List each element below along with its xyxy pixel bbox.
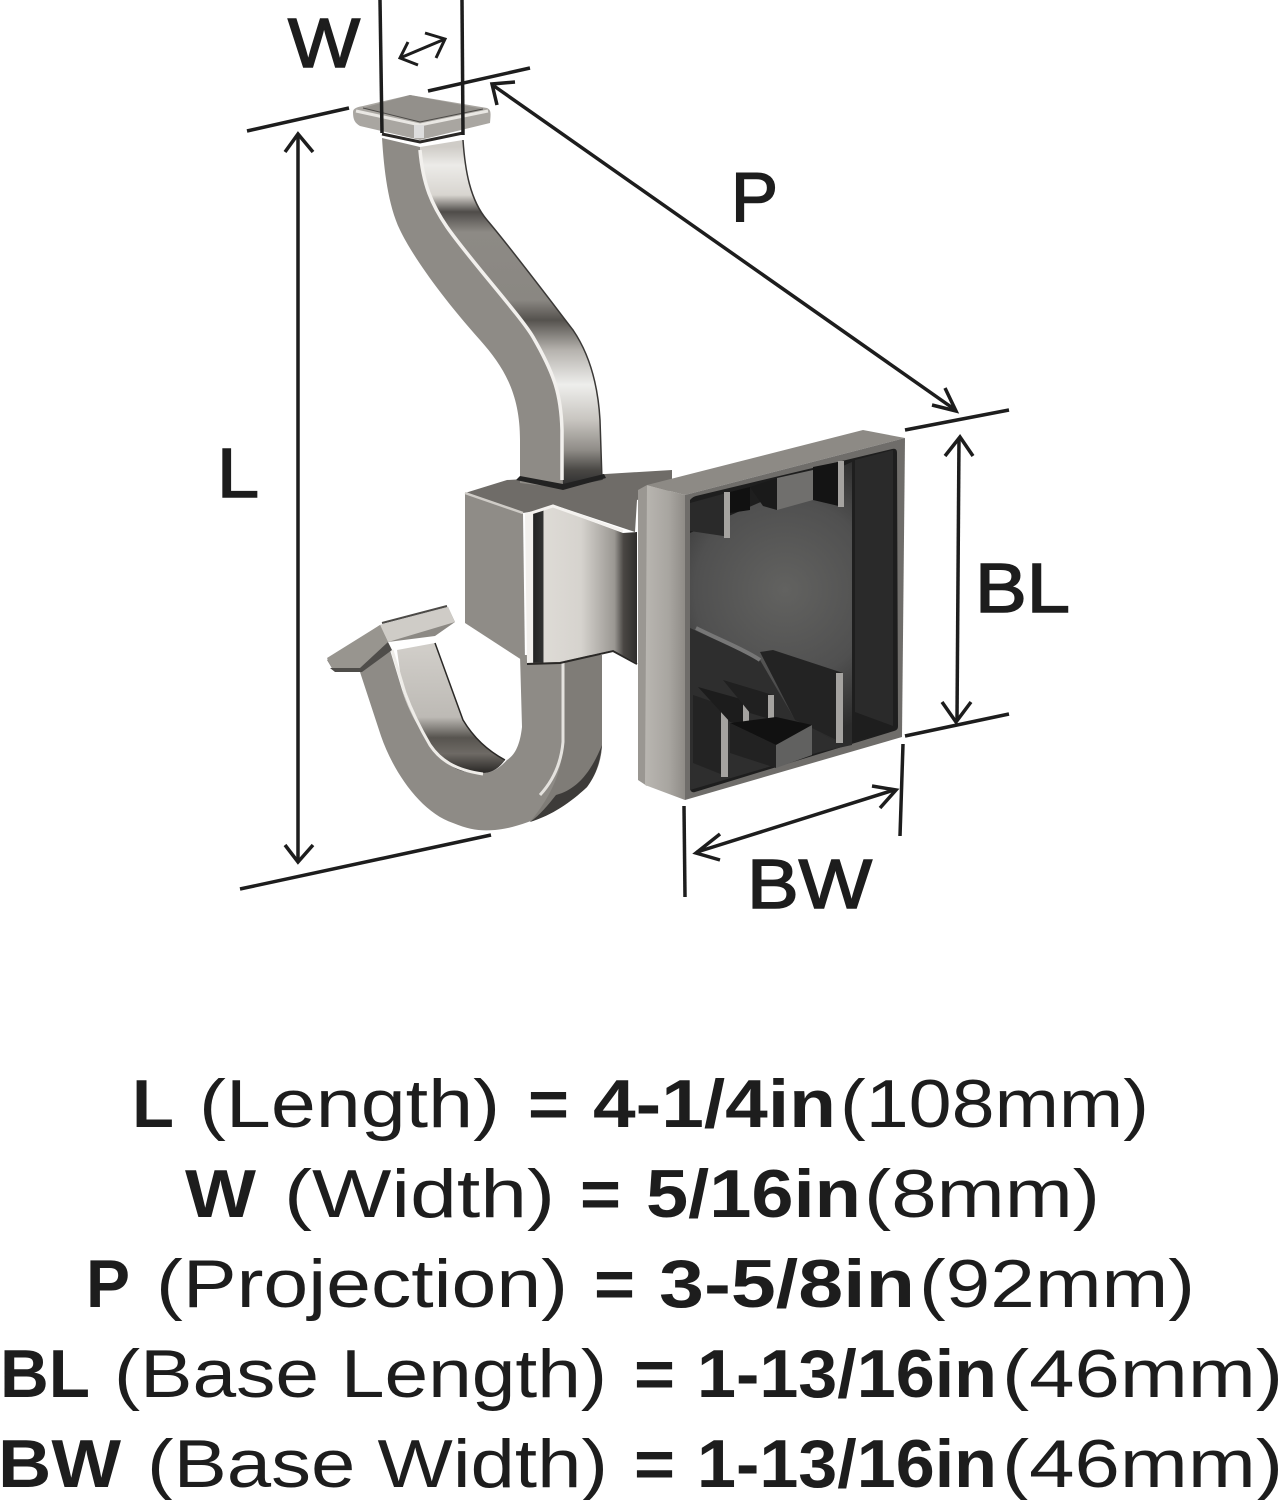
square base plate <box>638 430 905 800</box>
hook tip <box>327 606 455 672</box>
specification list <box>0 1066 1283 1500</box>
spec: width: (8mm) <box>864 1156 1100 1232</box>
dimension P <box>428 68 1009 430</box>
spec: projection: = <box>594 1246 635 1322</box>
top cap of hook <box>353 95 491 142</box>
spec: base length: = <box>634 1336 675 1412</box>
spec: projection: 3-5/8in <box>659 1246 915 1322</box>
dimension W <box>380 0 463 135</box>
spec: projection: (92mm) <box>919 1246 1195 1322</box>
upper arm of hook <box>382 138 606 490</box>
spec: base width: 1-13/16in <box>697 1426 997 1500</box>
spec: projection: (Projection) <box>156 1246 568 1322</box>
spec: base width <box>0 1426 1283 1500</box>
hook collar <box>465 470 672 664</box>
label BW: BW <box>747 845 872 923</box>
spec: width: W <box>185 1156 257 1232</box>
lower curved hook <box>360 643 602 830</box>
label W: W <box>288 4 360 82</box>
spec: base length: (46mm) <box>1002 1336 1283 1412</box>
inner clips <box>690 461 844 777</box>
spec: base length: BL <box>0 1336 90 1412</box>
label BL: BL <box>975 549 1070 627</box>
spec: width: (Width) <box>284 1156 555 1232</box>
spec: base length: (Base Length) <box>114 1336 607 1412</box>
dimension BL <box>905 437 1009 736</box>
spec: base width: (Base Width) <box>147 1426 608 1500</box>
spec: length <box>132 1066 1149 1142</box>
spec: projection <box>86 1246 1195 1322</box>
spec: projection: P <box>86 1246 130 1322</box>
spec: width: 5/16in <box>646 1156 861 1232</box>
spec: base length: 1-13/16in <box>697 1336 997 1412</box>
spec: base width: = <box>634 1426 675 1500</box>
spec: base length <box>0 1336 1283 1412</box>
dimension lines <box>240 0 1009 897</box>
spec: length: 4-1/4in <box>593 1066 836 1142</box>
spec: length: (Length) <box>199 1066 500 1142</box>
spec: width <box>185 1156 1100 1232</box>
dimension L <box>240 108 491 889</box>
spec: base width: (46mm) <box>1002 1426 1283 1500</box>
spec: width: = <box>580 1156 621 1232</box>
dimension BW <box>684 744 903 897</box>
label L: L <box>217 434 259 512</box>
spec: length: L <box>132 1066 174 1142</box>
hook illustration <box>327 95 905 830</box>
spec: length: = <box>528 1066 569 1142</box>
spec: length: (108mm) <box>840 1066 1149 1142</box>
label P: P <box>731 158 778 236</box>
